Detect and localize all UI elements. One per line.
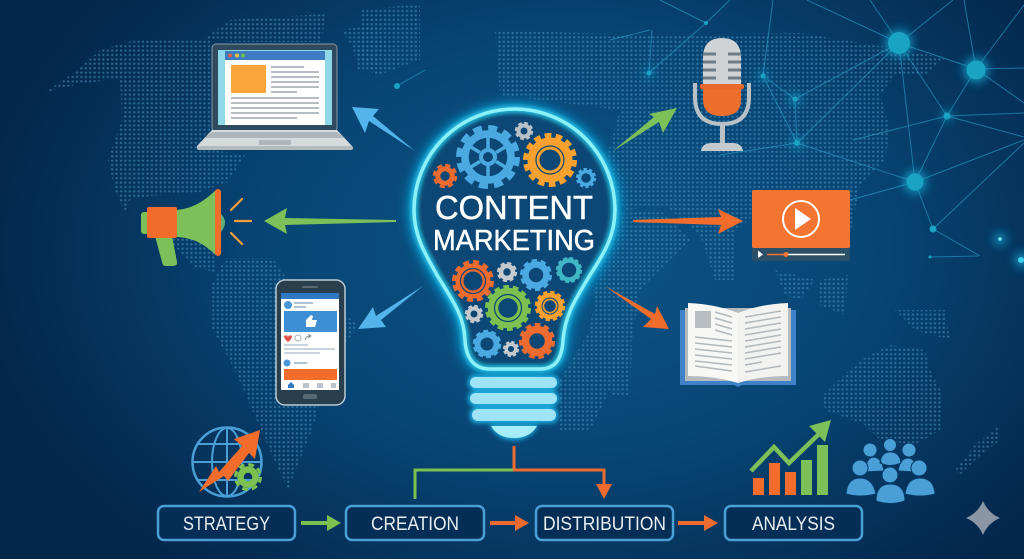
step: strategy	[158, 506, 295, 540]
icon: laptop	[197, 44, 353, 150]
gear: small orange	[434, 165, 456, 187]
step: distribution	[536, 506, 673, 540]
step: distribution: DISTRIBUTION	[543, 514, 666, 535]
icon: growth bar chart	[751, 420, 831, 495]
arrow: to book	[605, 286, 669, 329]
icon: microphone	[695, 38, 749, 151]
icon: audience people	[846, 438, 935, 504]
gear: small gray	[516, 123, 532, 139]
arrow: to megaphone	[264, 208, 396, 234]
arrow: distribution to analysis	[678, 515, 718, 531]
icon: sparkle watermark	[966, 501, 1000, 535]
gear: amber	[536, 292, 564, 320]
step: analysis: ANALYSIS	[752, 514, 835, 535]
gear: gray small	[466, 306, 482, 322]
arrow: to smartphone	[358, 286, 423, 329]
icon: globe with arrow and gear	[192, 428, 262, 496]
gear: blue bottom	[474, 331, 500, 357]
gear: teal	[557, 258, 581, 282]
gear: small blue	[577, 169, 595, 187]
gear: green	[487, 287, 529, 329]
gears upper	[434, 123, 595, 187]
title line 1: CONTENT	[435, 189, 593, 226]
connector lines from bulb	[415, 446, 612, 499]
light bulb	[414, 109, 615, 440]
icon: smartphone	[276, 280, 345, 405]
arrow: to microphone	[613, 108, 677, 151]
arrow: strategy to creation	[301, 515, 341, 531]
arrow: creation to distribution	[490, 515, 529, 531]
gear: blue	[522, 260, 550, 290]
title text	[433, 189, 595, 257]
step: strategy: STRATEGY	[183, 514, 270, 535]
arrow: to video	[633, 209, 743, 234]
bulb base	[468, 375, 559, 440]
step: analysis	[725, 506, 862, 540]
gear: orange bottom	[520, 324, 554, 358]
title line 2: MARKETING	[433, 225, 595, 257]
icon: open book	[680, 303, 796, 387]
gear: gray	[498, 263, 516, 281]
network of connected nodes	[394, 0, 1024, 267]
gear: big blue	[459, 128, 517, 186]
process flow	[158, 506, 862, 540]
step: creation: CREATION	[371, 514, 459, 535]
icon: megaphone	[141, 189, 251, 266]
gear: orange	[454, 262, 492, 300]
icon: video player	[752, 190, 850, 261]
gears lower	[454, 258, 581, 358]
step: creation	[346, 506, 484, 540]
gear: gray tiny	[504, 342, 518, 356]
gear: large amber	[526, 136, 574, 184]
arrow: to laptop	[352, 107, 415, 151]
